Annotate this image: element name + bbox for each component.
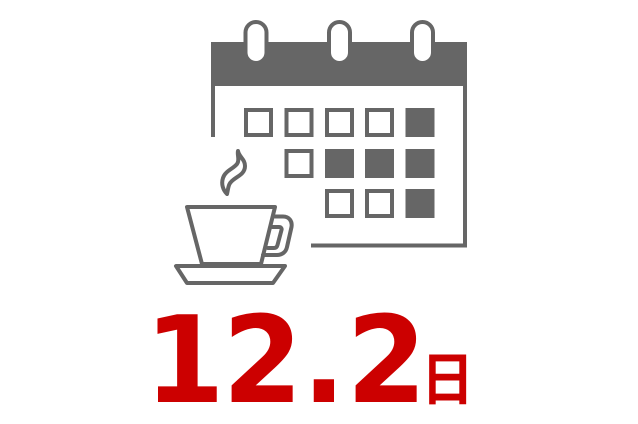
unit: 日 [421,348,474,412]
icon: coffee cup [176,151,292,283]
saucer [176,266,285,283]
icon: calendar [211,22,467,246]
value: 12.2 days [144,291,474,424]
calendar day grid [246,110,432,216]
calendar binding rings [246,22,433,63]
cup handle [263,216,292,255]
calendar header bar [211,42,467,86]
steam [222,151,245,194]
cup body [187,207,275,264]
calendar body outline [213,86,465,246]
